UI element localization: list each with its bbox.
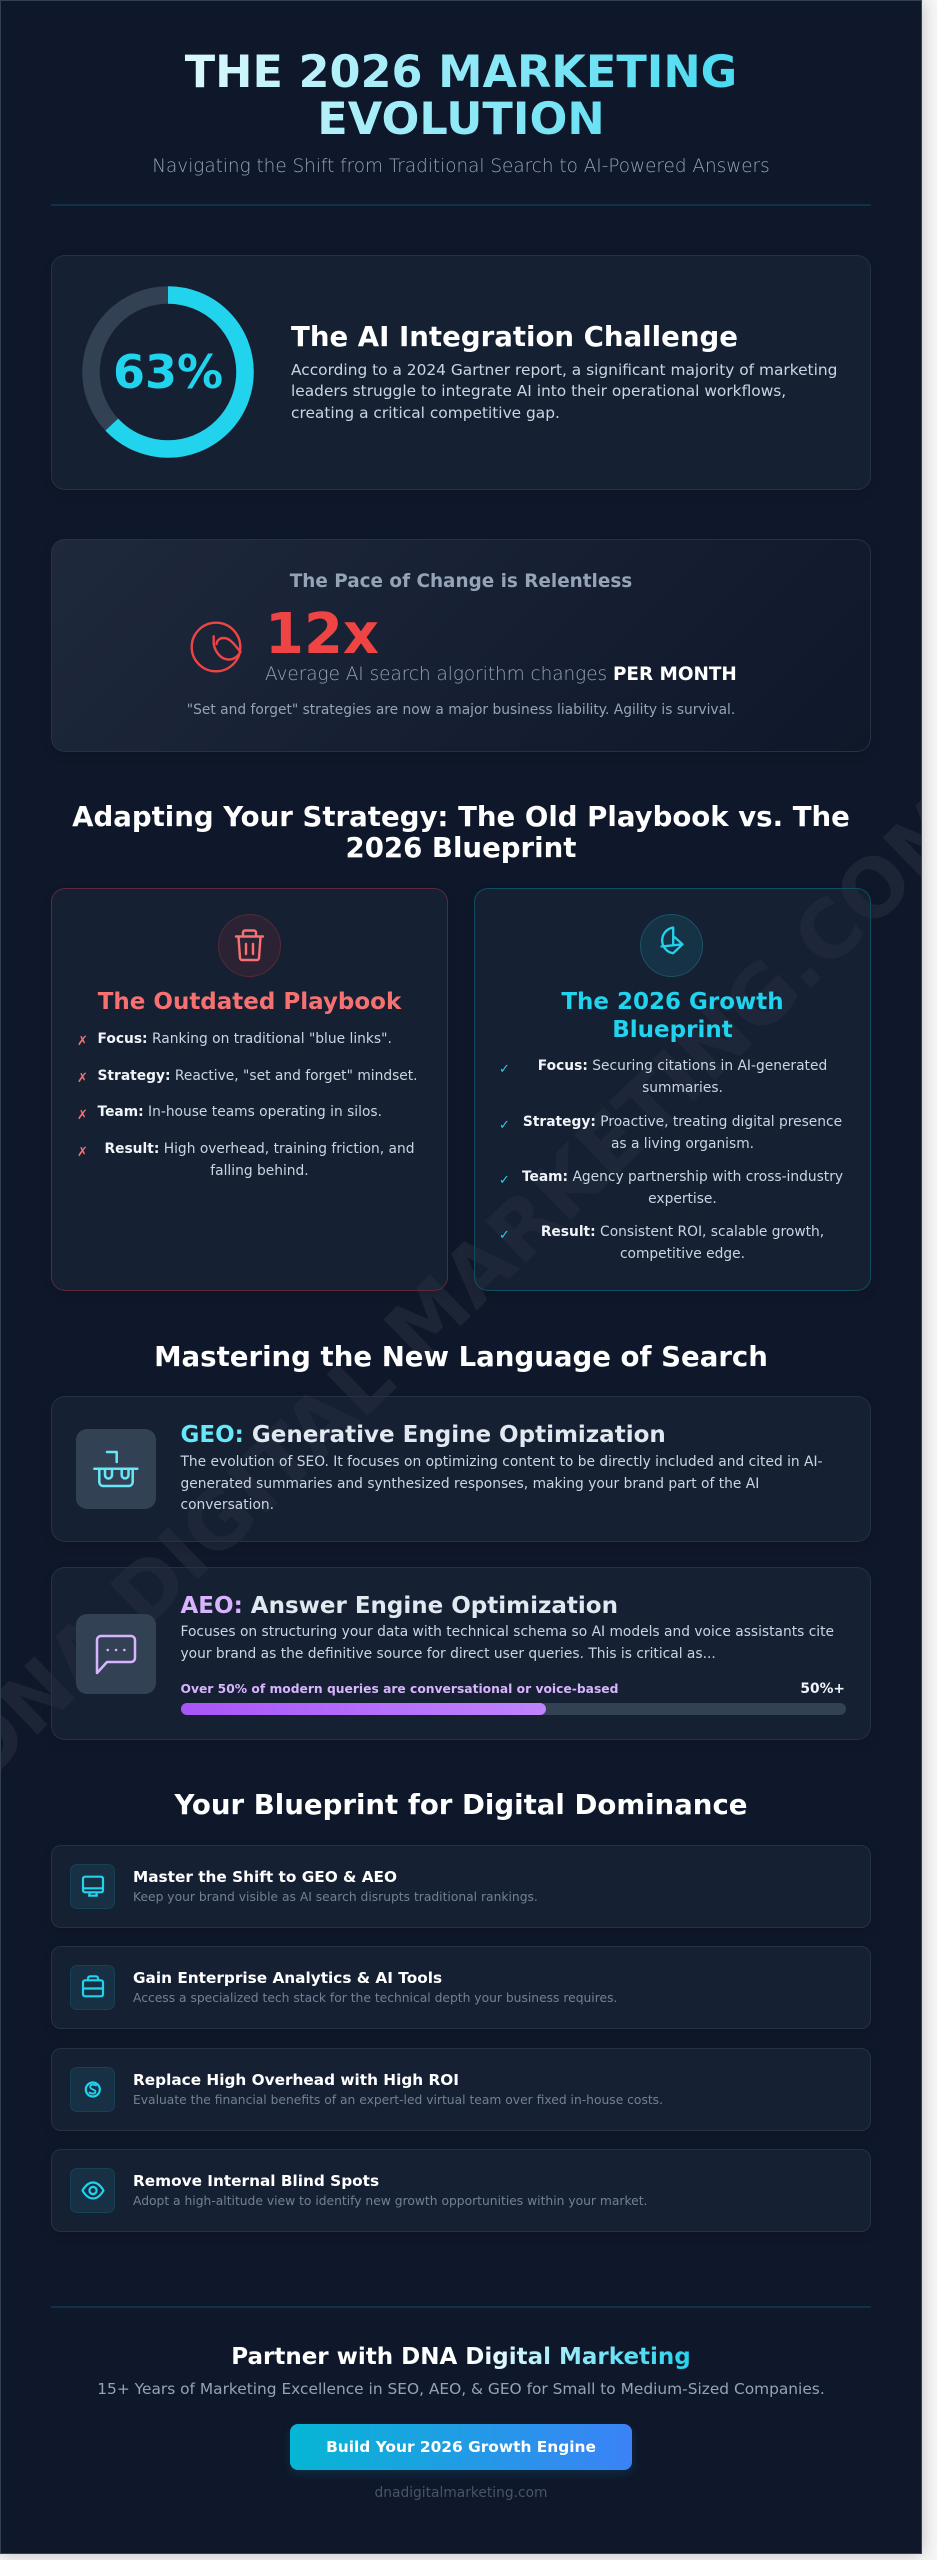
item title: Master the Shift to GEO & AEO bbox=[133, 1868, 397, 1886]
stat caption: Average AI search algorithm changes PER MONTH bbox=[265, 664, 737, 685]
body text: The evolution of SEO. It focuses on optimizing content to be directly included and cited in AI- bbox=[180, 1454, 823, 1470]
item: result bbox=[104, 1141, 415, 1179]
donut chart: 63%: 63% bbox=[113, 345, 223, 399]
body text: your brand as the definitive source for direct user queries. This is critical as... bbox=[180, 1646, 716, 1662]
item: result: competitive edge. bbox=[620, 1246, 745, 1262]
item: focus: Focus: Ranking on traditional "blue links". bbox=[98, 1031, 392, 1047]
item title: Remove Internal Blind Spots bbox=[133, 2172, 379, 2190]
item: blind spots bbox=[51, 2149, 871, 2232]
heading: The 2026 Growth bbox=[561, 989, 784, 1015]
website link: dnadigitalmarketing.com bbox=[374, 2485, 548, 2501]
body text: generated summaries and synthesized responses, making your brand part of the AI bbox=[180, 1476, 759, 1492]
panel: AEO bbox=[51, 1567, 871, 1740]
cross mark: ✗ bbox=[77, 1145, 88, 1160]
check mark: ✓ bbox=[499, 1062, 510, 1077]
item: strategy: Strategy: Reactive, "set and forget" mindset. bbox=[98, 1068, 418, 1084]
list: growth items bbox=[499, 1058, 843, 1262]
heading: The Pace of Change is Relentless bbox=[290, 571, 632, 592]
item: result: falling behind. bbox=[210, 1163, 309, 1179]
subtitle: Navigating the Shift from Traditional Search to AI-Powered Answers bbox=[152, 156, 770, 177]
body text bbox=[180, 1624, 834, 1662]
cross mark: ✗ bbox=[77, 1108, 88, 1123]
icon: trash bbox=[218, 914, 281, 977]
button: Build Your 2026 Growth Engine bbox=[326, 2438, 596, 2456]
icon: chat bubble bbox=[76, 1614, 156, 1694]
item description: Keep your brand visible as AI search disrupts traditional rankings. bbox=[133, 1890, 538, 1904]
heading: The Outdated Playbook bbox=[98, 989, 401, 1015]
section heading: search: Mastering the New Language of Search bbox=[154, 1340, 768, 1372]
item: strategy: as a living organism. bbox=[611, 1136, 754, 1152]
item description: Access a specialized tech stack for the technical depth your business requires. bbox=[133, 1991, 617, 2005]
icon: eye bbox=[70, 2168, 114, 2213]
cross mark: ✗ bbox=[77, 1034, 88, 1049]
item: focus bbox=[538, 1058, 827, 1096]
item: enterprise analytics bbox=[51, 1946, 871, 2029]
progress bar bbox=[180, 1703, 846, 1715]
heading: The AI Integration Challenge bbox=[291, 320, 738, 353]
section heading: strategy: Adapting Your Strategy: The Old Playbook vs. The bbox=[72, 800, 850, 833]
title: THE 2026 MARKETING bbox=[185, 46, 737, 98]
panel: GEO bbox=[51, 1396, 871, 1542]
icon: briefcase bbox=[70, 1965, 114, 2010]
item: result: Result: Consistent ROI, scalable growth, bbox=[541, 1224, 824, 1240]
heading bbox=[561, 989, 784, 1043]
progress label: Over 50% of modern queries are conversational or voice-based bbox=[180, 1682, 618, 1696]
cross mark: ✗ bbox=[77, 1070, 88, 1086]
body text bbox=[180, 1454, 823, 1513]
item title: Gain Enterprise Analytics & AI Tools bbox=[133, 1969, 442, 1987]
heading: Blueprint bbox=[612, 1017, 733, 1043]
icon: monitor bbox=[70, 1864, 114, 1909]
note: "Set and forget" strategies are now a major business liability. Agility is survival. bbox=[187, 702, 735, 718]
progress value: 50%+ bbox=[800, 1681, 845, 1697]
stat: 12x: 12x bbox=[265, 602, 379, 667]
item description: Evaluate the financial benefits of an expert-led virtual team over fixed in-house costs. bbox=[133, 2092, 663, 2106]
item: strategy bbox=[523, 1114, 842, 1152]
section heading: strategy bbox=[72, 800, 850, 864]
title bbox=[51, 49, 871, 142]
item: focus: Focus: Securing citations in AI-generated bbox=[538, 1058, 827, 1074]
body text bbox=[291, 360, 837, 422]
item: result: Result: High overhead, training friction, and bbox=[104, 1141, 415, 1157]
body text: Focuses on structuring your data with technical schema so AI models and voice assistants cite bbox=[180, 1624, 834, 1640]
item: master the shift bbox=[51, 1845, 871, 1928]
title: EVOLUTION bbox=[317, 93, 605, 145]
item: team: expertise. bbox=[648, 1191, 717, 1207]
icon: algorithm swirl bbox=[190, 622, 242, 672]
section heading: blueprint: Your Blueprint for Digital Dominance bbox=[174, 1788, 748, 1820]
check mark: ✓ bbox=[499, 1228, 510, 1243]
button bbox=[290, 2424, 632, 2470]
item: team: Team: In-house teams operating in silos. bbox=[98, 1104, 382, 1120]
item: team: Team: Agency partnership with cross-industry bbox=[522, 1169, 843, 1185]
check mark: ✓ bbox=[499, 1118, 510, 1133]
item: result bbox=[541, 1224, 824, 1262]
body text: creating a critical competitive gap. bbox=[291, 404, 560, 422]
panel: growth blueprint bbox=[474, 888, 871, 1291]
item: focus: summaries. bbox=[642, 1080, 723, 1096]
body text: leaders struggle to integrate AI into their operational workflows, bbox=[291, 382, 786, 400]
item description: Adopt a high-altitude view to identify new growth opportunities within your market. bbox=[133, 2194, 647, 2208]
body text: According to a 2024 Gartner report, a significant majority of marketing bbox=[291, 360, 837, 378]
icon: pie arrow bbox=[640, 914, 703, 977]
item title: Replace High Overhead with High ROI bbox=[133, 2070, 459, 2088]
footer heading: Partner with DNA Digital Marketing bbox=[231, 2344, 691, 2370]
heading: GEO: Generative Engine Optimization bbox=[180, 1422, 666, 1448]
item: strategy: Strategy: Proactive, treating digital presence bbox=[523, 1114, 842, 1130]
panel: AI integration challenge bbox=[51, 255, 871, 490]
donut chart: 63% bbox=[82, 286, 254, 458]
item: team bbox=[522, 1169, 843, 1207]
check mark: ✓ bbox=[499, 1173, 510, 1188]
footer tagline: 15+ Years of Marketing Excellence in SEO, AEO, & GEO for Small to Medium-Sized Companies. bbox=[97, 2380, 825, 2398]
icon: GEO bbox=[76, 1429, 156, 1509]
icon: coin bbox=[70, 2066, 114, 2112]
progress fill bbox=[180, 1703, 546, 1715]
heading: AEO: Answer Engine Optimization bbox=[180, 1593, 618, 1619]
panel: pace of change bbox=[51, 539, 871, 752]
section heading: strategy: 2026 Blueprint bbox=[346, 831, 576, 864]
panel: outdated playbook bbox=[51, 888, 448, 1291]
list: outdated items bbox=[77, 1031, 418, 1179]
body text: conversation. bbox=[180, 1497, 274, 1513]
item: replace overhead bbox=[51, 2048, 871, 2130]
